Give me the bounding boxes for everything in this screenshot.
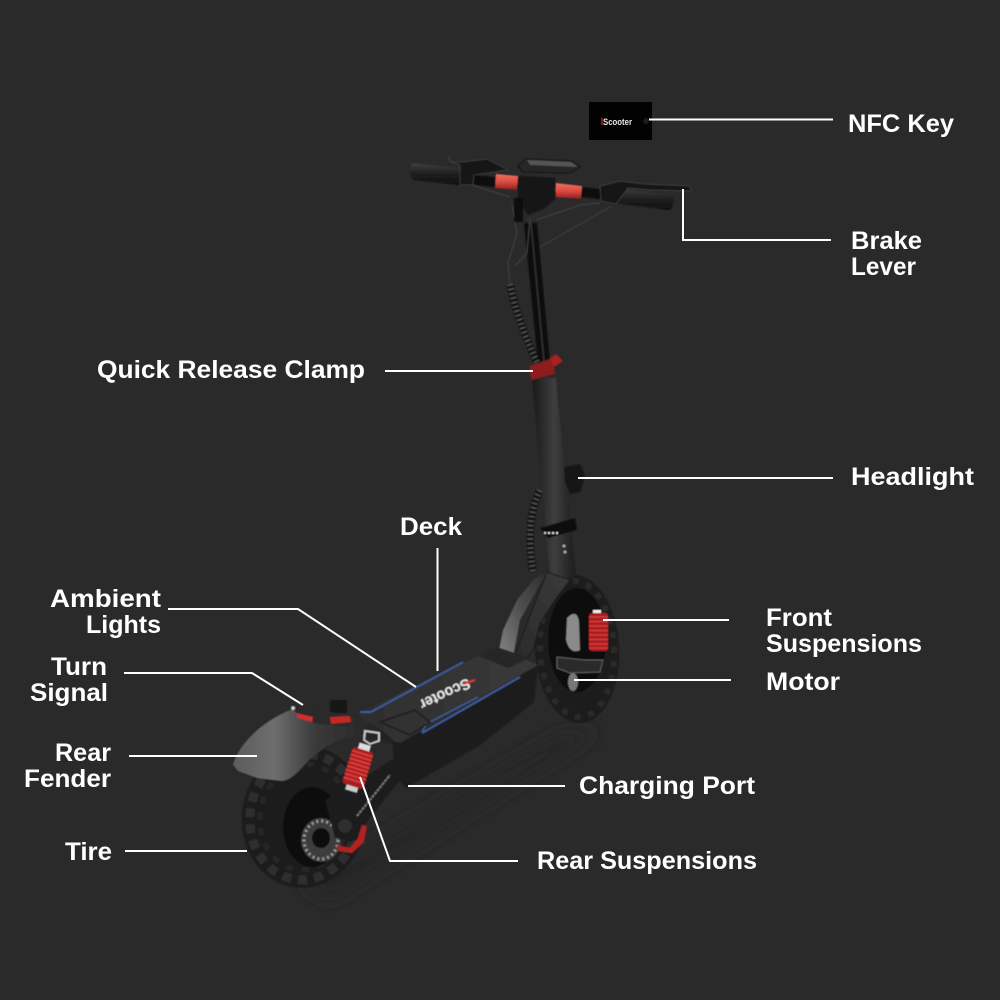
rear fender (233, 705, 397, 781)
label: Headlight: Headlight (851, 463, 975, 491)
lower stem (532, 378, 576, 578)
leader: front suspensions (603, 619, 729, 621)
label: Ambient Lights: Lights (86, 611, 161, 639)
brake caliper (337, 825, 367, 853)
handlebar (410, 156, 691, 284)
label: Quick Release Clamp: Quick Release Clamp (97, 356, 365, 384)
right grip (613, 188, 674, 210)
rear suspension spring (340, 741, 376, 794)
label: NFC Key: NFC Key (848, 110, 954, 138)
label: Rear Fender (24, 739, 111, 793)
label: Front Suspensions (766, 604, 922, 658)
label: Front Suspensions: Front (766, 604, 833, 632)
leader: headlight (578, 477, 833, 479)
front wheel (531, 573, 623, 725)
label: Tire: Tire (65, 838, 112, 866)
cables (472, 185, 612, 284)
front suspension spring (589, 610, 608, 651)
label: Rear Fender: Rear (55, 739, 111, 767)
leader: deck (436, 548, 438, 671)
folding joint (540, 518, 577, 554)
label: Ambient Lights (50, 585, 162, 639)
display (518, 159, 580, 173)
deck side (393, 665, 538, 788)
upper stem (524, 223, 550, 362)
front fender (497, 572, 570, 665)
quick release clamp (529, 354, 563, 380)
label: Rear Suspensions: Rear Suspensions (537, 847, 757, 875)
label: Turn Signal: Turn (51, 653, 107, 681)
leader: NFC key (649, 118, 833, 120)
scooter illustration (233, 156, 691, 896)
leader: rear suspensions (360, 777, 518, 861)
leader: turn signal (124, 673, 303, 705)
label: Front Suspensions: Suspensions (766, 630, 922, 658)
left clamp and lever (448, 156, 508, 185)
leader: quick release clamp (385, 370, 533, 372)
NFC key card: Scooter (603, 117, 632, 127)
leader: rear fender (129, 755, 257, 757)
deck (357, 647, 538, 743)
leader: charging port (408, 785, 565, 787)
leader: motor (574, 679, 731, 681)
label: Rear Fender: Fender (24, 765, 111, 793)
bar (458, 173, 617, 201)
rear wheel (233, 738, 375, 896)
leader: ambient lights (168, 609, 416, 687)
floor shadow (300, 730, 600, 900)
label: Brake Lever: Lever (851, 253, 916, 281)
coiled cable (510, 284, 540, 572)
turn signal (291, 700, 353, 726)
label: Charging Port: Charging Port (579, 772, 756, 800)
label: Brake Lever (851, 227, 922, 281)
label: Deck: Deck (400, 513, 462, 541)
right clamp and brake lever (600, 181, 691, 204)
label: Turn Signal (30, 653, 108, 707)
red collars (495, 174, 518, 190)
left grip (410, 163, 460, 185)
deck logo: Scooter (417, 674, 473, 713)
ambient light strips (360, 662, 520, 733)
headlight (564, 464, 585, 494)
label: Ambient Lights: Ambient (50, 585, 162, 613)
rear swing arm (325, 756, 408, 842)
center stem head (518, 176, 556, 215)
label: Turn Signal: Signal (30, 679, 108, 707)
label: Brake Lever: Brake (851, 227, 922, 255)
leader: tire (125, 850, 247, 852)
suspension bracket (364, 731, 379, 744)
NFC key card (589, 102, 652, 140)
label: Motor: Motor (766, 668, 840, 696)
leader: brake lever (683, 189, 831, 240)
